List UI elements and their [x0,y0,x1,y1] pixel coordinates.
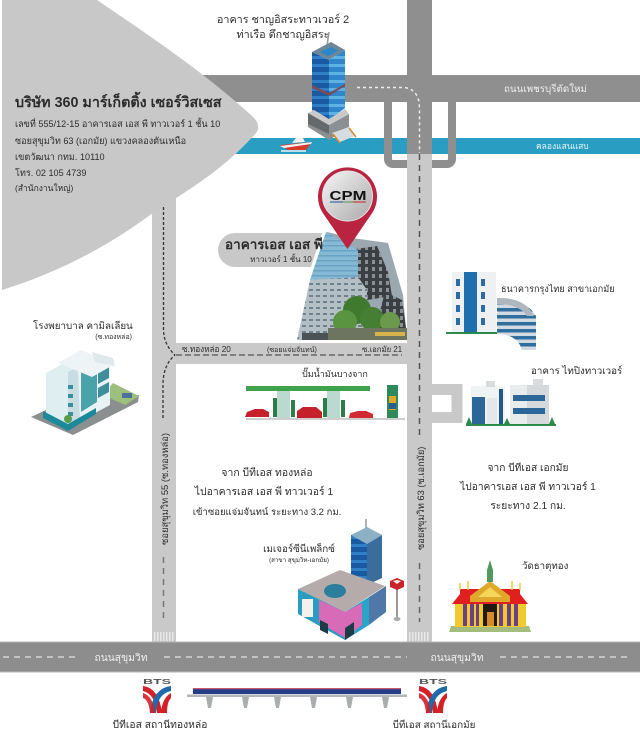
company address [15,117,220,193]
icon: Krung Thai building [446,272,536,350]
road label: Soi Sukhumvit 55: ซอยสุขุมวิท 55 (ซ.ทองหล่อ) [159,433,171,545]
company name: บริษัท 360 มาร์เก็ตติ้ง เซอร์วิสเซส [15,91,222,111]
road labels: Soi names: ซ.ทองหล่อ 20 [182,345,231,354]
photo: SSP Tower [297,232,407,340]
label: Bangchak station: ปั๊มน้ำมันบางจาก [302,367,368,379]
text: route from Thonglor [193,466,341,518]
text: route from Thonglor: เข้าซอยแจ่มจันทน์ ระยะทาง 3.2 กม. [193,506,341,518]
road: Thonglor [152,190,176,642]
label pill: SSP Tower [218,233,323,267]
label pill: SSP Tower: ทาวเวอร์ 1 ชั้น 10 [250,253,312,264]
canal: Saen Saep: คลองแสนแสบ [536,141,589,151]
road: Phetchaburi [190,75,640,102]
road: Sukhumvit [0,642,640,672]
text: route from Thonglor: จาก บีทีเอส ทองหล่อ [221,466,313,479]
text: route from Ekkamai: ระยะทาง 2.1 กม. [490,501,566,512]
road label: Soi Sukhumvit 63: ซอยสุขุมวิท 63 (ซ.เอกมัย) [416,447,427,550]
label pill: SSP Tower: อาคารเอส เอส พี [225,237,323,252]
company address: ซอยสุขุมวิท 63 (เอกมัย) แขวงคลองตันเหนือ [15,136,186,147]
text: route from Ekkamai: ไปอาคารเอส เอส พี ทาวเวอร์ 1 [459,481,596,493]
label: BTS Ekkamai: บีทีเอส สถานีเอกมัย [393,719,475,731]
road: Ekkamai lower section [407,154,432,642]
label: Major Cineplex: (สาขา สุขุมวิท-เอกมัย) [269,557,329,564]
company address: เขตวัฒนา กทม. 10110 [15,152,105,162]
zebra crossings [154,632,428,641]
road labels: Soi names: (ซอยแจ่มจันทน์) [267,346,317,354]
canal: Saen Saep [220,138,640,154]
icon: bus stop sign [390,578,404,621]
road: Soi Chaem Chan [152,343,432,364]
icon: BTS logo right [419,679,448,713]
road dashes [3,88,632,657]
label: Camillian Hospital: โรงพยาบาล คามิลเลียน [33,320,133,332]
text: route from Ekkamai [459,462,596,512]
icon: location pin CPM [318,167,377,249]
overpass loop [388,102,452,164]
label: Camillian Hospital: (ซ.ทองหล่อ) [95,334,132,341]
icon: location pin CPM: CPM [330,188,366,203]
icon: BTS logo left [143,679,172,713]
label: Charn Issara Tower: อาคาร ชาญอิสระทาวเวอร์ 2 [217,13,349,26]
label: Major Cineplex [263,542,335,564]
text: route from Ekkamai: จาก บีทีเอส เอกมัย [488,462,569,474]
label: Camillian Hospital [33,320,133,341]
label: Phetchaburi road: ถนนเพชรบุรีตัดใหม่ [504,83,587,95]
text: route from Thonglor: ไปอาคารเอส เอส พี ทาวเวอร์ 1 [194,485,333,498]
icon: BTS logo right: BTS [419,679,448,686]
label: BTS Thonglor: บีทีเอส สถานีทองหล่อ [113,719,207,731]
icon: BTS train viaduct [187,688,407,708]
icon: Tipco Tower [466,379,556,426]
road: Ekkamai upper section [407,0,432,154]
road labels: Soi names: ซ.เอกมัย 21 [362,345,402,354]
company address: โทร. 02 105 4739 [15,168,86,178]
label: Major Cineplex: เมเจอร์ซีนีเพล็กซ์ [263,542,335,555]
label: Wat That Thong: วัดธาตุทอง [522,561,569,572]
company address: (สำนักงานใหญ่) [15,183,73,193]
label: Sukhumvit road right: ถนนสุขุมวิท [430,652,484,664]
icon: Charn Issara tower [308,32,356,143]
company address: เลขที่ 555/12-15 อาคารเอส เอส พี ทาวเวอร์ 1 ชั้น 10 [15,117,220,129]
label: Charn Issara Tower: ท่าเรือ ตึกชาญอิสระ [237,28,329,41]
label: Charn Issara Tower [217,13,349,41]
icon: Major Cineplex [298,519,386,640]
side road near Tipco [432,390,457,418]
icon: BTS logo left: BTS [143,679,172,686]
label: Sukhumvit road left: ถนนสุขุมวิท [94,652,148,664]
icon: gas station [245,385,405,419]
label: Tipco Tower: อาคาร ไทปิงทาวเวอร์ [531,365,622,377]
icon: Wat That Thong temple [449,560,531,632]
company panel [2,0,258,290]
road labels: Soi names [182,345,402,354]
icon: hospital [31,350,139,435]
icon: boat [280,138,312,151]
label: Krung Thai Bank: ธนาคารกรุงไทย สาขาเอกมัย [501,284,615,295]
